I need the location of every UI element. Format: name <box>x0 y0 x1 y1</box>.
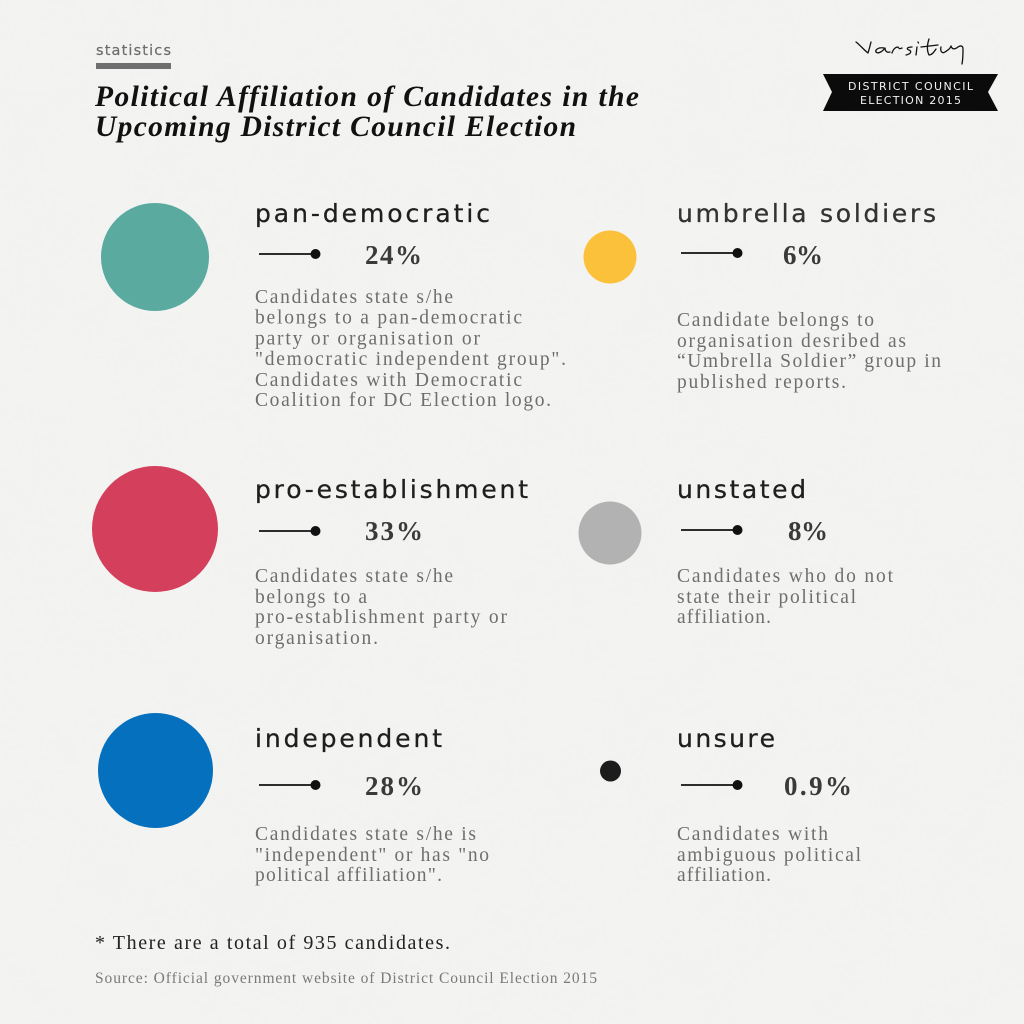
heading: unstated: unstated <box>677 475 806 504</box>
circle: unstated 8% <box>578 502 642 564</box>
value: 0.9%: 0.9% <box>784 771 852 801</box>
description: “Umbrella Soldier” group in <box>677 351 941 372</box>
ribbon: District Council Election 2015: DISTRICT COUNCIL <box>848 80 974 93</box>
panel: umbrella soldiers <box>584 199 941 393</box>
pointer <box>681 248 742 258</box>
description <box>677 824 862 886</box>
description: affiliation. <box>677 865 771 886</box>
panel: independent <box>98 713 489 886</box>
description: "independent" or has "no <box>255 845 489 866</box>
description: ambiguous political <box>677 845 862 866</box>
section label: statistics: statistics <box>96 43 171 59</box>
logo: Varsity <box>856 39 963 64</box>
panel: unstated <box>578 475 894 628</box>
value: 33%: 33% <box>365 516 423 546</box>
description: party or organisation or <box>255 328 480 350</box>
value: 8%: 8% <box>788 516 828 546</box>
description: Candidate belongs to <box>677 310 874 331</box>
pointer <box>259 249 320 259</box>
pointer <box>681 525 742 535</box>
value: 6%: 6% <box>783 240 823 270</box>
description: Candidates state s/he is <box>255 824 476 845</box>
circle: independent 28% <box>98 713 213 828</box>
description: organisation. <box>255 628 378 649</box>
description: Coalition for DC Election logo. <box>255 390 551 411</box>
description <box>677 566 894 628</box>
description: pro-establishment party or <box>255 607 508 628</box>
description: Candidates with Democratic <box>255 370 522 391</box>
title <box>94 81 639 143</box>
heading: umbrella soldiers: umbrella soldiers <box>677 199 936 228</box>
title: Political Affiliation of Candidates in the <box>94 81 639 113</box>
description: affiliation. <box>677 607 771 628</box>
description <box>255 566 508 649</box>
description: Candidates who do not <box>677 566 894 587</box>
panel: unsure <box>600 724 862 886</box>
heading: independent: independent <box>255 724 442 753</box>
description: political affiliation". <box>255 865 442 886</box>
panel: pan-democratic <box>101 199 566 411</box>
value: 24%: 24% <box>365 240 422 270</box>
description: published reports. <box>677 372 846 393</box>
ribbon: District Council Election 2015: ELECTION 2015 <box>860 94 961 107</box>
heading: pan-democratic: pan-democratic <box>255 199 490 228</box>
heading: pro-establishment: pro-establishment <box>255 475 528 504</box>
title: Upcoming District Council Election <box>95 111 576 143</box>
description: Candidates state s/he <box>255 566 453 587</box>
description: belongs to a pan-democratic <box>255 308 522 328</box>
circle: unsure 0.9% <box>600 760 621 782</box>
description: Candidates state s/he <box>255 287 453 308</box>
description: Candidates with <box>677 824 828 845</box>
footnote: * There are a total of 935 candidates. <box>95 932 450 954</box>
ribbon: District Council Election 2015 <box>823 74 998 111</box>
description <box>255 287 566 411</box>
description: state their political <box>677 587 857 608</box>
pointer <box>681 780 742 790</box>
description: belongs to a <box>255 587 367 608</box>
description: organisation desribed as <box>677 331 906 352</box>
circle: pan-democratic 24% <box>101 203 209 311</box>
circle: pro-establishment 33% <box>92 466 218 592</box>
pointer <box>259 526 320 536</box>
value: 28%: 28% <box>365 771 423 801</box>
description <box>255 824 489 886</box>
pointer <box>259 780 320 790</box>
description: "democratic independent group". <box>255 349 566 370</box>
heading: unsure: unsure <box>677 724 775 753</box>
section label: statistics <box>96 43 171 69</box>
source: Source: Official government website of District Council Election 2015 <box>95 970 597 987</box>
circle: umbrella soldiers 6% <box>584 230 636 284</box>
description <box>677 310 941 393</box>
panel: pro-establishment <box>92 466 528 649</box>
